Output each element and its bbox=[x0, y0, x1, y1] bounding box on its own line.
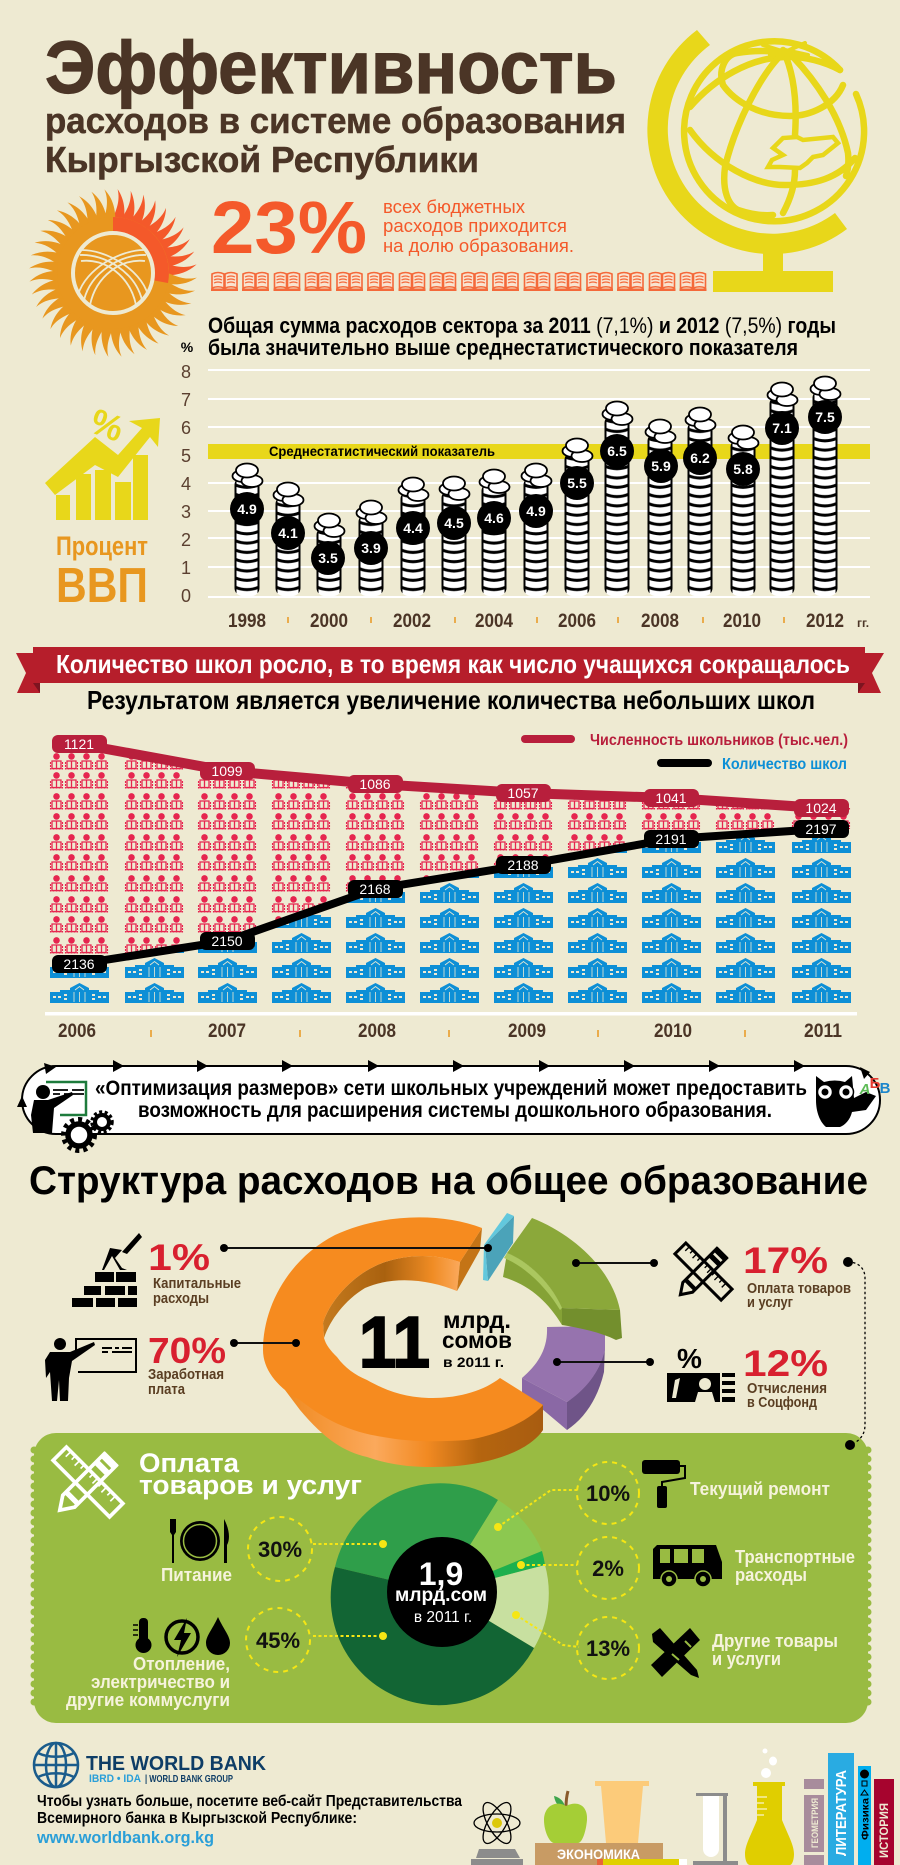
icon: ruler and pencil white bbox=[53, 1447, 123, 1517]
banner bbox=[16, 647, 884, 693]
illustration: flask bbox=[745, 1748, 794, 1865]
bar chart: education spending share of GDP: 2004 bbox=[475, 611, 513, 632]
bar chart: education spending share of GDP: 4.6 bbox=[484, 510, 504, 526]
legend bbox=[521, 732, 848, 773]
bar chart: education spending share of GDP: 8 bbox=[181, 362, 191, 382]
icon: sun bbox=[29, 189, 197, 357]
stat: capital 1% bbox=[148, 1237, 241, 1307]
stat: social fund 12%: 12% bbox=[743, 1343, 828, 1384]
bar chart: education spending share of GDP: 0 bbox=[181, 586, 191, 606]
donut total bbox=[359, 1303, 512, 1383]
label: percent of GDP bbox=[56, 531, 148, 613]
icon: bricks and trowel bbox=[72, 1233, 142, 1307]
title: Кыргызской Республики bbox=[45, 139, 479, 180]
pie chart: 1,9 bbox=[419, 1556, 463, 1592]
panel title: Оплата bbox=[139, 1448, 240, 1478]
illustration: standing books bbox=[804, 1753, 894, 1865]
illustration: test tube bbox=[693, 1793, 738, 1865]
panel: goods and services: 10% bbox=[586, 1481, 630, 1506]
stat: goods 17%: и услуг bbox=[747, 1295, 793, 1311]
stat: salaries 70%: плата bbox=[148, 1382, 186, 1398]
bar chart: education spending share of GDP: 2010 bbox=[723, 611, 761, 632]
stat: capital 1%: 1% bbox=[148, 1237, 210, 1278]
stat: capital 1%: расходы bbox=[153, 1291, 209, 1307]
line: students: 1121 bbox=[64, 736, 94, 752]
pictogram chart: students and schools bbox=[45, 735, 857, 1042]
segment: goods 17% bbox=[503, 1218, 622, 1340]
labels: и услуги bbox=[712, 1649, 781, 1669]
stat: salaries 70%: Заработная bbox=[148, 1367, 224, 1383]
footer text bbox=[36, 1793, 462, 1847]
bar chart: education spending share of GDP: 2 bbox=[181, 530, 191, 550]
icon: ruler and pencil bbox=[675, 1243, 732, 1300]
pie chart: млрд.сом bbox=[395, 1585, 487, 1606]
text: budget share bbox=[383, 197, 574, 256]
icon row: books bbox=[211, 272, 706, 291]
panel: goods and services bbox=[34, 1433, 868, 1723]
bar chart: education spending share of GDP: 6 bbox=[181, 418, 191, 438]
illustration: apple bbox=[544, 1791, 587, 1843]
label: percent of GDP: Процент bbox=[56, 531, 148, 561]
pictogram chart: students and schools: 2008 bbox=[358, 1021, 396, 1042]
stat: social fund 12%: в Соцфонд bbox=[747, 1395, 817, 1411]
icon: utilities bbox=[133, 1617, 230, 1657]
icon: percent and banknote: % bbox=[677, 1343, 702, 1374]
illustration: standing books: ИСТОРИЯ bbox=[877, 1803, 891, 1858]
line: schools: 2150 bbox=[211, 933, 243, 949]
bar chart: education spending share of GDP: 3.9 bbox=[361, 540, 381, 556]
heading: GDP chart: была значительно выше среднестатистического показателя bbox=[208, 335, 798, 360]
pictogram chart: students and schools: 2010 bbox=[654, 1021, 692, 1042]
footer: World Bank logo: | WORLD BANK GROUP bbox=[145, 1773, 233, 1785]
title bbox=[45, 26, 626, 180]
pie chart bbox=[331, 1483, 549, 1705]
title: Эффективность bbox=[45, 26, 617, 109]
footer text: Всемирного банка в Кыргызской Республике: bbox=[37, 1810, 357, 1827]
icon: owl with letters: Б bbox=[870, 1075, 881, 1092]
label: percent of GDP: ВВП bbox=[56, 559, 148, 613]
bar chart: education spending share of GDP: 4.4 bbox=[403, 520, 423, 536]
panel: goods and services: 45% bbox=[256, 1628, 300, 1653]
labels: Отопление, bbox=[133, 1654, 230, 1674]
big stat: 23%: 23% bbox=[211, 186, 367, 269]
bar chart: education spending share of GDP: 5.5 bbox=[567, 475, 587, 491]
stat: salaries 70% bbox=[148, 1330, 226, 1398]
title: расходов в системе образования bbox=[45, 100, 626, 141]
text: budget share: расходов приходится bbox=[383, 216, 567, 236]
line: students: 1024 bbox=[805, 800, 837, 816]
line: schools: 2191 bbox=[655, 831, 687, 847]
bar chart: education spending share of GDP: 4.9 bbox=[237, 501, 257, 517]
icon: plate and cutlery bbox=[170, 1519, 229, 1563]
heading: expense structure: Структура расходов на общее образование bbox=[29, 1159, 868, 1203]
line: students bbox=[52, 735, 849, 817]
segment: social fund 12% bbox=[522, 1326, 605, 1430]
icon: growth arrow: % bbox=[85, 400, 129, 450]
panel: goods and services: 30% bbox=[258, 1537, 302, 1562]
illustration: standing books: ЛИТЕРАТУРА bbox=[833, 1770, 850, 1856]
bar chart: education spending share of GDP: 5.8 bbox=[733, 461, 753, 477]
line: students: 1057 bbox=[507, 785, 539, 801]
line: schools: 2188 bbox=[507, 857, 539, 873]
donut total: млрд. bbox=[443, 1307, 511, 1333]
bar chart: education spending share of GDP: 5 bbox=[181, 446, 191, 466]
bar chart: education spending share of GDP: 2006 bbox=[558, 611, 596, 632]
bar chart: education spending share of GDP: 6.5 bbox=[607, 443, 627, 459]
panel: goods and services: 2% bbox=[592, 1556, 624, 1581]
icon: pencil and ruler black bbox=[651, 1628, 700, 1678]
icon: teacher at board bbox=[45, 1338, 136, 1401]
panel title: товаров и услуг bbox=[139, 1470, 362, 1500]
illustration: standing books: ГЕОМЕТРИЯ bbox=[810, 1798, 821, 1848]
heading: GDP chart bbox=[208, 313, 836, 360]
labels: электричество и bbox=[91, 1672, 230, 1692]
subheading: Результатом является увеличение количества небольших школ bbox=[87, 685, 815, 715]
stat: social fund 12%: Отчисления bbox=[747, 1381, 827, 1397]
arrows on border bbox=[17, 1060, 870, 1107]
legend: Численность школьников (тыс.чел.) bbox=[590, 732, 848, 749]
panel: goods and services: 13% bbox=[586, 1636, 630, 1661]
illustration: economics book bbox=[535, 1843, 663, 1865]
stat: social fund 12% bbox=[743, 1343, 828, 1411]
panel title bbox=[139, 1448, 362, 1500]
bar chart: education spending share of GDP: 1 bbox=[181, 558, 191, 578]
bar chart: education spending share of GDP: 2000 bbox=[310, 611, 348, 632]
donut total: сомов bbox=[442, 1327, 512, 1353]
icon grid: schools bbox=[50, 833, 851, 1003]
stat: capital 1%: Капитальные bbox=[153, 1276, 241, 1292]
illustration: standing books: Физика bbox=[860, 1798, 872, 1840]
labels: расходы bbox=[735, 1565, 807, 1585]
segment: capital 1% bbox=[483, 1213, 514, 1281]
bar chart: education spending share of GDP: 2008 bbox=[641, 611, 679, 632]
footer: World Bank logo bbox=[34, 1743, 267, 1787]
bar chart: education spending share of GDP: 7 bbox=[181, 390, 191, 410]
callouts: percentage circles bbox=[246, 1462, 639, 1679]
heading: GDP chart: Общая сумма расходов сектора за 2011 (7,1%) и 2012 (7,5%) годы bbox=[208, 313, 836, 338]
line: students: 1041 bbox=[655, 790, 687, 806]
labels bbox=[66, 1479, 855, 1710]
icon: owl with letters bbox=[816, 1075, 891, 1127]
bar chart: education spending share of GDP bbox=[181, 339, 870, 632]
line: schools bbox=[52, 820, 849, 973]
donut total: 11 bbox=[359, 1303, 430, 1383]
bar chart: education spending share of GDP: 4.5 bbox=[444, 515, 464, 531]
illustration: economics book: ЭКОНОМИКА bbox=[557, 1846, 640, 1862]
stat: goods 17%: 17% bbox=[743, 1240, 828, 1281]
pictogram chart: students and schools: 2006 bbox=[58, 1021, 96, 1042]
labels: Другие товары bbox=[712, 1631, 838, 1651]
stat: goods 17%: Оплата товаров bbox=[747, 1281, 851, 1297]
bar chart: education spending share of GDP: % bbox=[181, 339, 194, 355]
bar chart: education spending share of GDP: 4 bbox=[181, 474, 191, 494]
bar chart: education spending share of GDP: 5.9 bbox=[651, 458, 671, 474]
bar chart: education spending share of GDP: гг. bbox=[857, 616, 869, 630]
bar chart: education spending share of GDP: 3.5 bbox=[318, 550, 338, 566]
bar chart: education spending share of GDP: 6.2 bbox=[690, 450, 710, 466]
icon: growth arrow bbox=[45, 400, 160, 520]
callout: optimization: «Оптимизация размеров» сети школьных учреждений может предоставить bbox=[95, 1076, 807, 1100]
bar chart: education spending share of GDP: 2002 bbox=[393, 611, 431, 632]
icon: bus bbox=[653, 1545, 722, 1587]
stat: salaries 70%: 70% bbox=[148, 1330, 226, 1371]
pictogram chart: students and schools: 2011 bbox=[804, 1021, 842, 1042]
stat: goods 17% bbox=[743, 1240, 851, 1311]
line: schools: 2197 bbox=[805, 821, 837, 837]
footer: World Bank logo: IBRD • IDA bbox=[89, 1773, 141, 1785]
text: budget share: всех бюджетных bbox=[383, 197, 525, 217]
donut chart: expense structure bbox=[263, 1213, 622, 1467]
bar chart: education spending share of GDP: 4.1 bbox=[278, 525, 298, 541]
bar chart: education spending share of GDP: 2012 bbox=[806, 611, 844, 632]
pictogram chart: students and schools: 2009 bbox=[508, 1021, 546, 1042]
bar chart: education spending share of GDP: 4.9 bbox=[526, 503, 546, 519]
footer: World Bank logo: THE WORLD BANK bbox=[86, 1753, 267, 1775]
illustration: pencil bbox=[597, 1859, 687, 1865]
callout: optimization bbox=[17, 1060, 891, 1150]
donut total: в 2011 г. bbox=[443, 1354, 504, 1370]
illustration: atom bbox=[471, 1799, 523, 1865]
icon grid: students bbox=[50, 753, 850, 953]
icon: paint roller bbox=[642, 1460, 685, 1508]
pie chart: в 2011 г. bbox=[414, 1609, 472, 1626]
labels: Транспортные bbox=[735, 1547, 855, 1567]
labels: Питание bbox=[161, 1565, 232, 1585]
icon: globe bbox=[647, 30, 864, 292]
illustration: beaker bbox=[595, 1781, 649, 1843]
bar chart: education spending share of GDP: 3 bbox=[181, 502, 191, 522]
line: students: 1099 bbox=[211, 763, 243, 779]
legend: Количество школ bbox=[722, 756, 847, 773]
icon: percent and banknote bbox=[667, 1343, 735, 1402]
callout: optimization: возможность для расширения системы дошкольного образования. bbox=[138, 1098, 772, 1122]
icon: teacher and gears bbox=[31, 1082, 112, 1150]
connector: dotted link to panel bbox=[843, 1257, 865, 1450]
text: budget share: на долю образования. bbox=[383, 236, 574, 256]
line: schools: 2136 bbox=[63, 956, 95, 972]
footer text: Чтобы узнать больше, посетите веб-сайт Представительства bbox=[37, 1793, 462, 1810]
bar chart: education spending share of GDP: Среднестатистический показатель bbox=[269, 443, 495, 459]
bar chart: education spending share of GDP: 1998 bbox=[228, 611, 266, 632]
line: students: 1086 bbox=[359, 776, 391, 792]
bar chart: education spending share of GDP: 7.1 bbox=[772, 420, 792, 436]
connectors bbox=[220, 1244, 658, 1366]
bar chart: education spending share of GDP: 7.5 bbox=[815, 409, 835, 425]
labels: Текущий ремонт bbox=[690, 1479, 830, 1499]
icon: owl with letters: В bbox=[880, 1080, 891, 1097]
pictogram chart: students and schools: 2007 bbox=[208, 1021, 246, 1042]
line: schools: 2168 bbox=[359, 881, 391, 897]
icon: owl with letters: А bbox=[859, 1081, 870, 1098]
footer text: www.worldbank.org.kg bbox=[36, 1828, 214, 1847]
segment: salaries 70% bbox=[263, 1217, 543, 1467]
labels: другие коммуслуги bbox=[66, 1690, 230, 1710]
